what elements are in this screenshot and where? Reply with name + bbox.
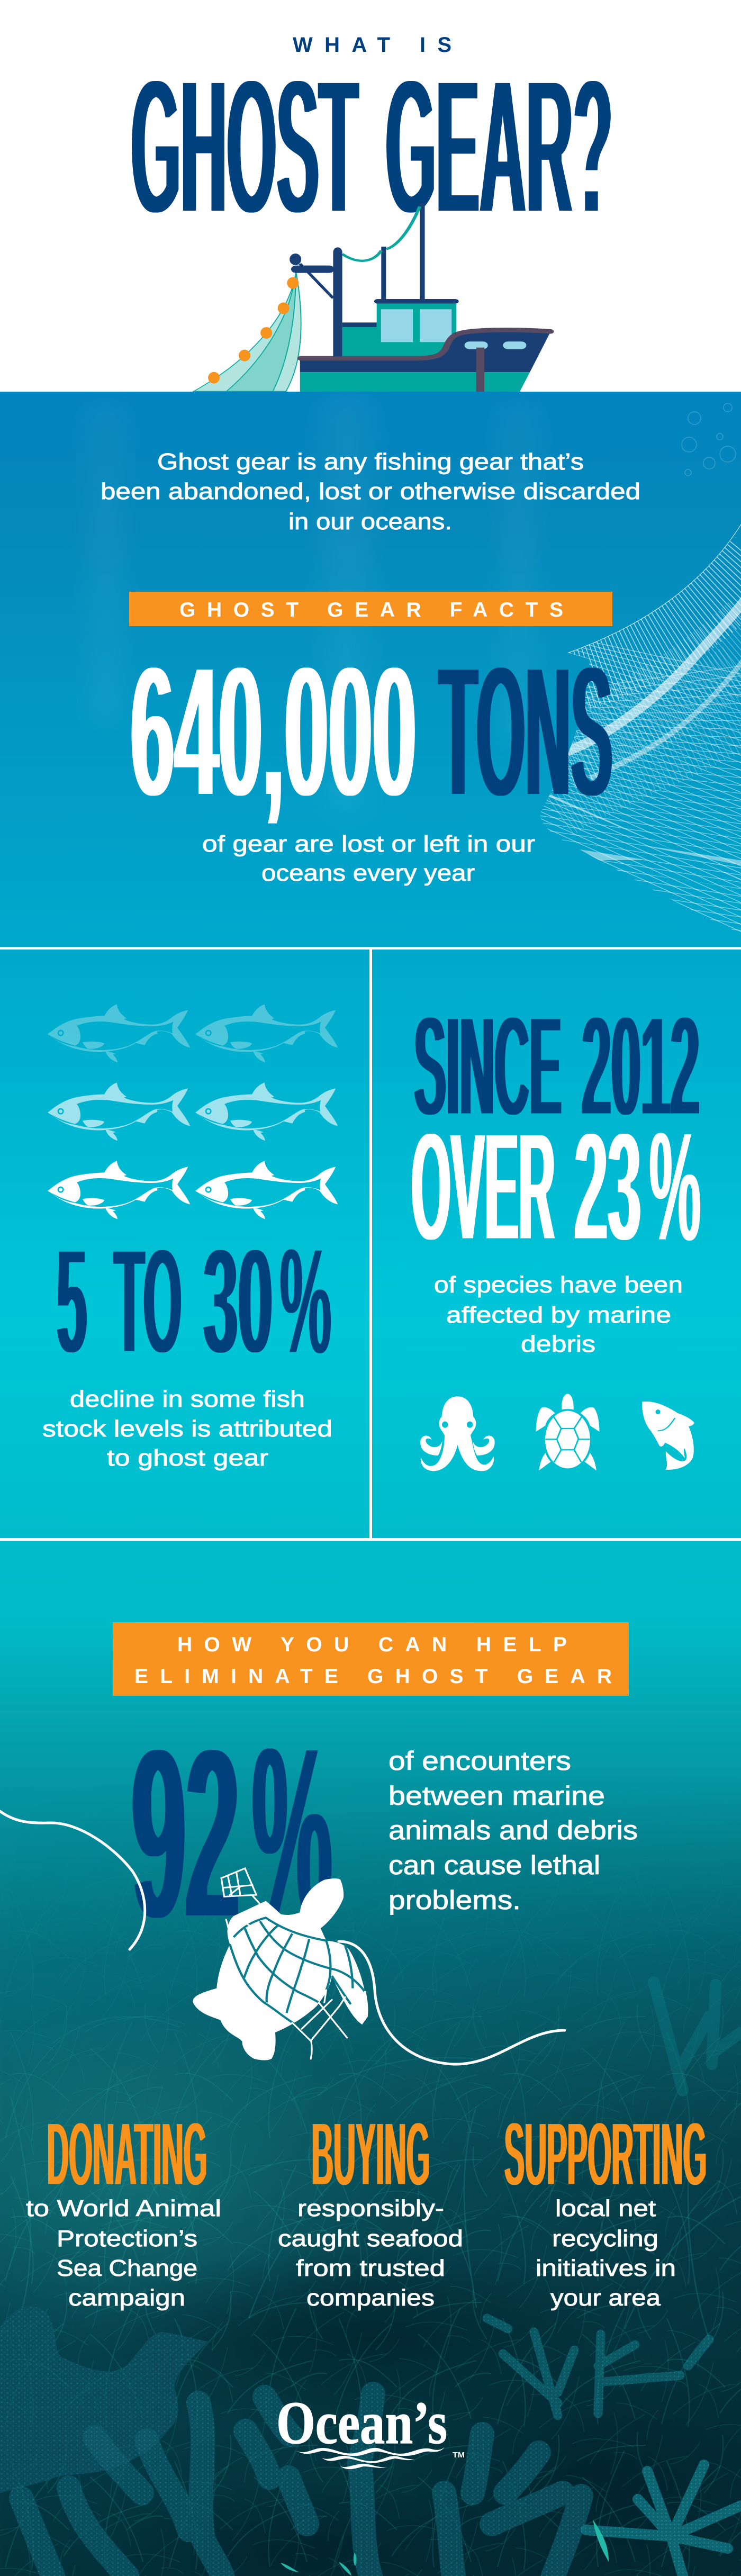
- text: buying details: companies: [306, 2285, 435, 2311]
- text: buying details: [278, 2195, 463, 2311]
- text: buying details: responsibly-: [297, 2195, 444, 2221]
- text: encounters: [388, 1746, 638, 1915]
- icon: jumping fish: [642, 1402, 694, 1470]
- intro text: been abandoned, lost or otherwise discarded: [101, 478, 640, 504]
- text: %: [279, 1216, 331, 1386]
- text: donating details: campaign: [68, 2285, 185, 2311]
- orange banner: how you can help: HOW YOU CAN HELP: [177, 1633, 567, 1656]
- seaweed texture: [0, 1918, 741, 2576]
- ghost line: right: [339, 1941, 565, 2064]
- text: donating details: Protection’s: [57, 2226, 197, 2252]
- stat: 92%: 92: [132, 1695, 239, 1972]
- stat: 5 to 30%: 30: [203, 1216, 273, 1386]
- illustration: fishing boat: [194, 203, 550, 392]
- orange banner: ghost gear facts: GHOST GEAR FACTS: [179, 599, 563, 621]
- light shafts: [90, 392, 535, 815]
- text: donating details: to World Animal: [26, 2195, 221, 2221]
- orange banner: how you can help: [113, 1622, 629, 1696]
- text: encounters: animals and debris: [388, 1815, 638, 1845]
- text: tons caption: [202, 831, 535, 886]
- text: buying details: from trusted: [296, 2255, 445, 2281]
- text: fish caption: decline in some fish: [70, 1386, 305, 1412]
- bubbles: [682, 403, 736, 476]
- illustration: fishing net: [545, 524, 741, 953]
- text: encounters: problems.: [388, 1885, 521, 1915]
- logo: Ocean's: TM: [453, 2451, 465, 2460]
- text: supporting details: recycling: [552, 2226, 658, 2252]
- text: %: [252, 1695, 332, 1972]
- ghost line: left: [0, 1811, 145, 1949]
- logo: Ocean's: Ocean’s: [276, 2389, 447, 2456]
- text: encounters: of encounters: [388, 1746, 571, 1776]
- text: encounters: can cause lethal: [388, 1850, 600, 1880]
- section dividers: [0, 947, 741, 1541]
- orange banner: how you can help: ELIMINATE GHOST GEAR: [134, 1665, 612, 1688]
- coral reef: [0, 1982, 741, 2576]
- icon: octopus: [420, 1396, 495, 1471]
- text: supporting details: local net: [555, 2195, 656, 2221]
- text: species caption: of species have been: [434, 1272, 683, 1298]
- text: fish caption: to ghost gear: [107, 1445, 268, 1471]
- text: species caption: [434, 1272, 683, 1357]
- text: encounters: between marine: [388, 1781, 605, 1811]
- text: supporting details: [536, 2195, 676, 2311]
- intro text: in our oceans.: [288, 509, 452, 535]
- text: fish caption: stock levels is attributed: [42, 1416, 332, 1442]
- intro text: [101, 449, 640, 535]
- fish rows: declining stock: [48, 1004, 338, 1219]
- net: [194, 273, 301, 391]
- text: donating details: [26, 2195, 221, 2311]
- text: DONATING: [47, 2103, 207, 2205]
- intro text: Ghost gear is any fishing gear that’s: [157, 449, 584, 475]
- stat: 5 to 30%: 5: [57, 1216, 87, 1386]
- stat: 5 to 30%: TO: [114, 1216, 182, 1386]
- text: tons caption: oceans every year: [261, 860, 475, 886]
- text: supporting details: initiatives in: [536, 2255, 676, 2281]
- text: donating details: Sea Change: [57, 2255, 197, 2281]
- illustration: entangled turtle: [193, 1868, 368, 2060]
- text: tons caption: of gear are lost or left in our: [202, 831, 535, 857]
- text: buying details: caught seafood: [278, 2226, 463, 2252]
- text: species caption: debris: [521, 1331, 595, 1357]
- icon: sea turtle: [536, 1394, 599, 1470]
- text: supporting details: your area: [550, 2285, 661, 2311]
- text: BUYING: [311, 2103, 430, 2205]
- text: species caption: affected by marine: [446, 1302, 671, 1328]
- eyebrow: what is: WHAT IS: [293, 33, 451, 57]
- text: fish caption: [42, 1386, 332, 1471]
- orange banner: ghost gear facts: [129, 592, 612, 626]
